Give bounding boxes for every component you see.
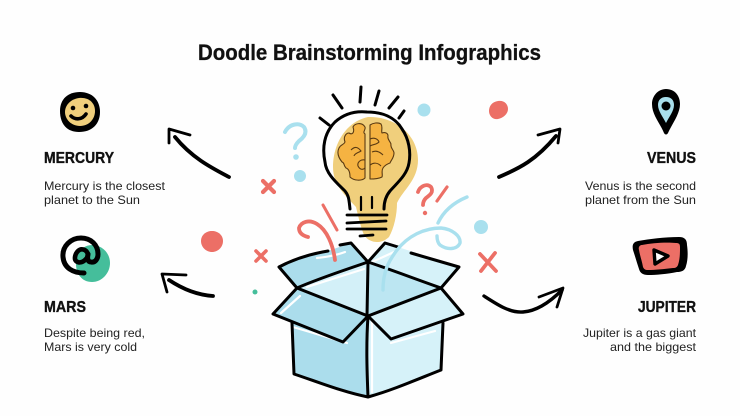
- ribbon: blue: [383, 197, 467, 290]
- confetti: red slash: [437, 187, 447, 201]
- text: venus description: planet from the Sun: [585, 193, 696, 207]
- confetti: dots: [201, 101, 508, 295]
- box lines: [273, 243, 463, 397]
- heading: mars: MARS: [44, 299, 86, 316]
- heading: mercury: MERCURY: [44, 150, 115, 167]
- heading: venus: VENUS: [647, 150, 696, 167]
- icon: at sign: [63, 238, 110, 282]
- box fills: [279, 243, 368, 288]
- icon: video play: [633, 237, 688, 275]
- panel: venus: [585, 89, 696, 207]
- text: jupiter description: Jupiter is a gas giant: [583, 326, 697, 340]
- ribbon: red: [299, 205, 337, 260]
- filaments: [361, 197, 372, 210]
- question mark: blue: [285, 124, 305, 160]
- arrow: to venus: [499, 129, 560, 177]
- text: mercury description: planet to the Sun: [44, 193, 140, 207]
- light bulb: [320, 87, 418, 242]
- title: Doodle Brainstorming Infographics: [198, 40, 541, 65]
- bulb rays: [320, 87, 404, 125]
- bulb yellow fill: [333, 117, 418, 242]
- arrow: to jupiter: [484, 288, 563, 312]
- text: jupiter description: and the biggest: [610, 340, 697, 354]
- confetti: red crosses: [256, 181, 496, 271]
- text: mars description: Mars is very cold: [44, 340, 137, 354]
- arrow: to mercury: [169, 129, 229, 177]
- icon: smiley face: [60, 92, 100, 132]
- panel: jupiter: [583, 237, 697, 354]
- bulb outline: [324, 112, 410, 209]
- brain: [338, 123, 394, 180]
- arrow: to mars: [162, 274, 213, 296]
- icon: map pin: [652, 89, 680, 134]
- panel: mars: [44, 238, 145, 354]
- cardboard box: [273, 243, 463, 397]
- text: mercury description: Mercury is the closest: [44, 179, 166, 193]
- heading: jupiter: JUPITER: [638, 299, 696, 316]
- text: venus description: Venus is the second: [585, 179, 696, 193]
- bulb base: [347, 215, 387, 236]
- text: mars description: Despite being red,: [44, 326, 145, 340]
- box highlights: [281, 252, 435, 392]
- panel: mercury: [44, 92, 166, 207]
- question mark: red: [418, 185, 432, 215]
